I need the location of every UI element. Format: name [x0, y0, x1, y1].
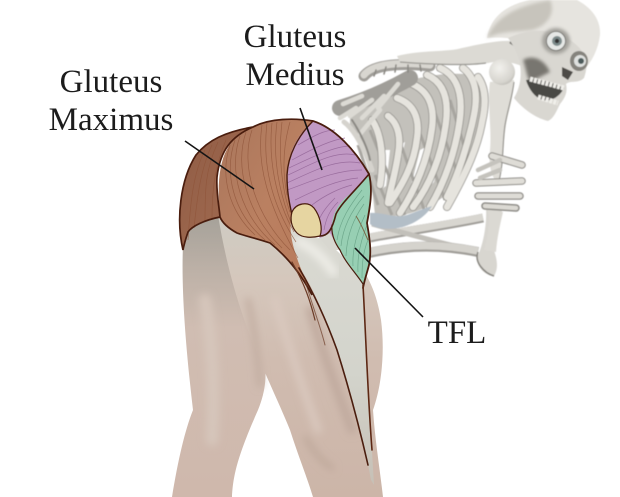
leader line: gluteus maximus — [185, 141, 254, 189]
left leg — [172, 215, 266, 497]
eye socket right — [570, 51, 588, 71]
teeth — [530, 79, 564, 103]
leader line: TFL — [355, 248, 423, 317]
label: Gluteus Maximus: Maximus — [49, 102, 173, 138]
forearm bones crossing below ribs — [369, 208, 503, 276]
nose cavity — [562, 67, 573, 80]
skull — [487, 0, 600, 121]
gluteus maximus outline — [180, 119, 313, 295]
leader line: gluteus medius — [300, 108, 322, 170]
humerus — [489, 80, 514, 184]
hand — [476, 156, 522, 208]
greater trochanter — [291, 204, 321, 237]
cartilage at base of ribs — [370, 206, 432, 229]
face and jaw — [508, 31, 586, 121]
skeleton — [340, 0, 600, 276]
clavicle and scapula — [397, 41, 527, 68]
rib bodies — [372, 68, 485, 213]
gaps between ribs — [380, 120, 484, 190]
muscle: gluteus maximus — [180, 119, 313, 295]
IT band — [288, 205, 374, 485]
band gap between gluteus medius and TFL — [320, 233, 340, 250]
spine and back ribs — [340, 63, 430, 170]
ribs — [372, 68, 485, 213]
mouth — [526, 79, 564, 100]
outer muscle contours — [292, 121, 372, 465]
eye socket left — [542, 28, 570, 54]
eyeball right — [574, 55, 586, 67]
cranium — [487, 0, 600, 76]
muscle: tensor fasciae latae — [332, 174, 371, 284]
muscle: gluteus medius — [287, 121, 370, 240]
label: Gluteus Medius: Gluteus — [244, 19, 346, 55]
gluteus maximus fibres — [188, 122, 298, 258]
right leg — [218, 215, 383, 497]
eyeball left — [546, 32, 566, 50]
leg shading — [205, 300, 352, 468]
lower arm below hand — [484, 210, 503, 252]
label: Gluteus Medius: Medius — [246, 57, 344, 93]
rib outlines — [372, 68, 485, 213]
thorax backing — [350, 74, 482, 216]
label: Gluteus Maximus: Gluteus — [60, 64, 162, 100]
label: TFL: TFL — [428, 315, 486, 351]
IT band edges — [299, 268, 368, 465]
far-side ribs — [358, 100, 470, 215]
cheek shadow — [523, 58, 550, 82]
